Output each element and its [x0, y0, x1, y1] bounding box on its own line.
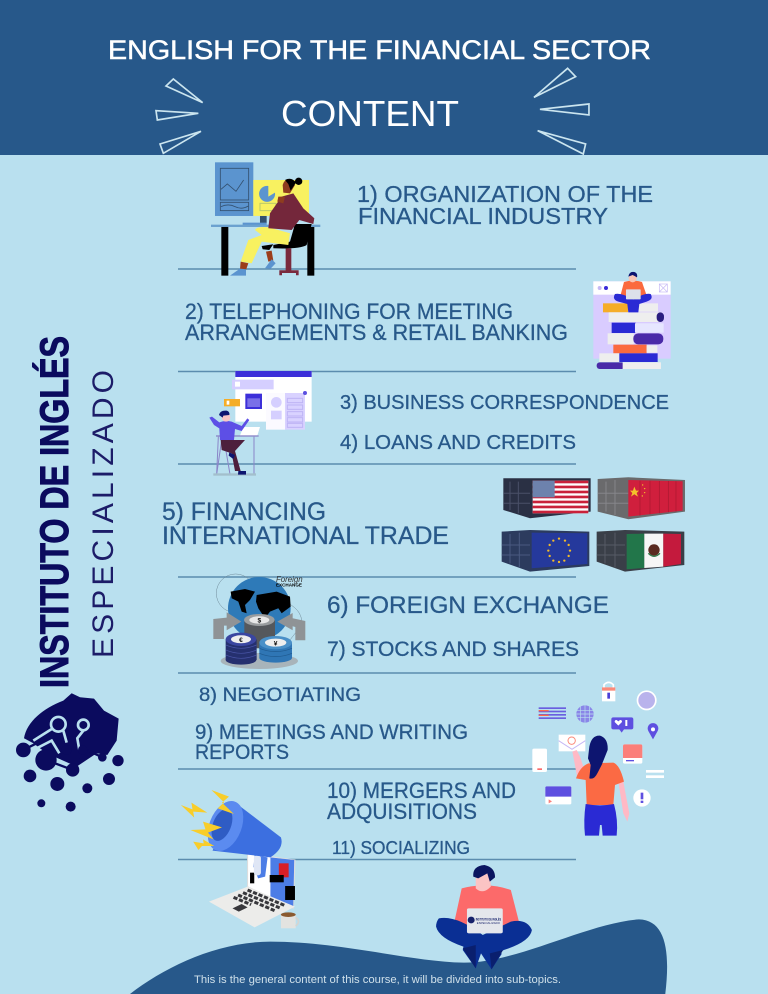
heading: content: CONTENT	[281, 93, 459, 134]
illustration: man with laptop	[436, 865, 532, 969]
icon: brand logo	[16, 693, 124, 812]
vertical brand name: INSTITUTO DE INGLÉS	[32, 336, 77, 688]
topic 1	[357, 181, 653, 229]
decorative wave footer	[130, 919, 667, 994]
illustration: foreign exchange globe and coins: €	[239, 637, 243, 644]
topic 1: FINANCIAL INDUSTRY	[358, 203, 608, 229]
illustration: foreign exchange globe and coins: $	[257, 618, 261, 625]
illustration: woman with web pages	[209, 371, 312, 476]
topic 9: 9) MEETINGS AND WRITING	[195, 721, 468, 744]
text: foreign exchange tag: EXCHANGE	[276, 583, 302, 588]
topic 2: 2) TELEPHONING FOR MEETING	[185, 299, 513, 324]
title: ENGLISH FOR THE FINANCIAL SECTOR	[108, 35, 651, 65]
topic 7: 7) STOCKS AND SHARES	[327, 638, 579, 661]
topic 10: 10) MERGERS AND	[327, 778, 516, 803]
vertical brand name: ESPECIALIZADO	[87, 370, 120, 658]
topic 4: 4) LOANS AND CREDITS	[340, 432, 576, 454]
container: Mexico	[597, 530, 684, 572]
text: laptop logo: ESPECIALIZADO	[477, 921, 500, 925]
topic 5: 5) FINANCING	[162, 498, 326, 526]
text: laptop logo	[468, 916, 501, 925]
footer note: This is the general content of this course, it will be divided into sub-topics.	[194, 974, 561, 986]
section dividers	[178, 269, 576, 860]
icon: right sparkle triangles	[534, 68, 589, 154]
header band	[0, 0, 768, 155]
illustration: foreign exchange globe and coins: ¥	[274, 640, 278, 647]
illustration: woman at desk	[211, 162, 320, 276]
topic 6: 6) FOREIGN EXCHANGE	[327, 592, 609, 619]
illustration: megaphone and laptop	[181, 790, 298, 928]
topic 5: INTERNATIONAL TRADE	[162, 522, 449, 550]
topic 9: REPORTS	[195, 741, 289, 764]
container: China	[598, 477, 685, 519]
topic 8: 8) NEGOTIATING	[199, 685, 361, 706]
illustration: foreign exchange globe and coins	[213, 574, 305, 669]
topic 2	[185, 299, 568, 345]
topic 10	[327, 778, 516, 824]
vertical brand name	[32, 336, 120, 688]
icon: left sparkle triangles	[156, 79, 203, 153]
topic 2: ARRANGEMENTS & RETAIL BANKING	[185, 320, 568, 345]
container: USA	[503, 478, 591, 518]
text: laptop logo: INSTITUTO DE INGLÉS	[476, 916, 501, 921]
topic 5	[162, 498, 449, 550]
container: EU	[502, 530, 589, 572]
topic 3: 3) BUSINESS CORRESPONDENCE	[340, 392, 669, 414]
topic 11: 11) SOCIALIZING	[332, 838, 470, 858]
topic 10: ADQUISITIONS	[327, 799, 477, 824]
topic 1: 1) ORGANIZATION OF THE	[357, 181, 653, 207]
text: foreign exchange tag: Foreign	[276, 575, 303, 584]
illustration: woman with social icons	[532, 682, 664, 836]
illustration: flag containers	[502, 477, 685, 572]
topic 9	[195, 721, 468, 764]
illustration: person on books	[593, 272, 671, 369]
